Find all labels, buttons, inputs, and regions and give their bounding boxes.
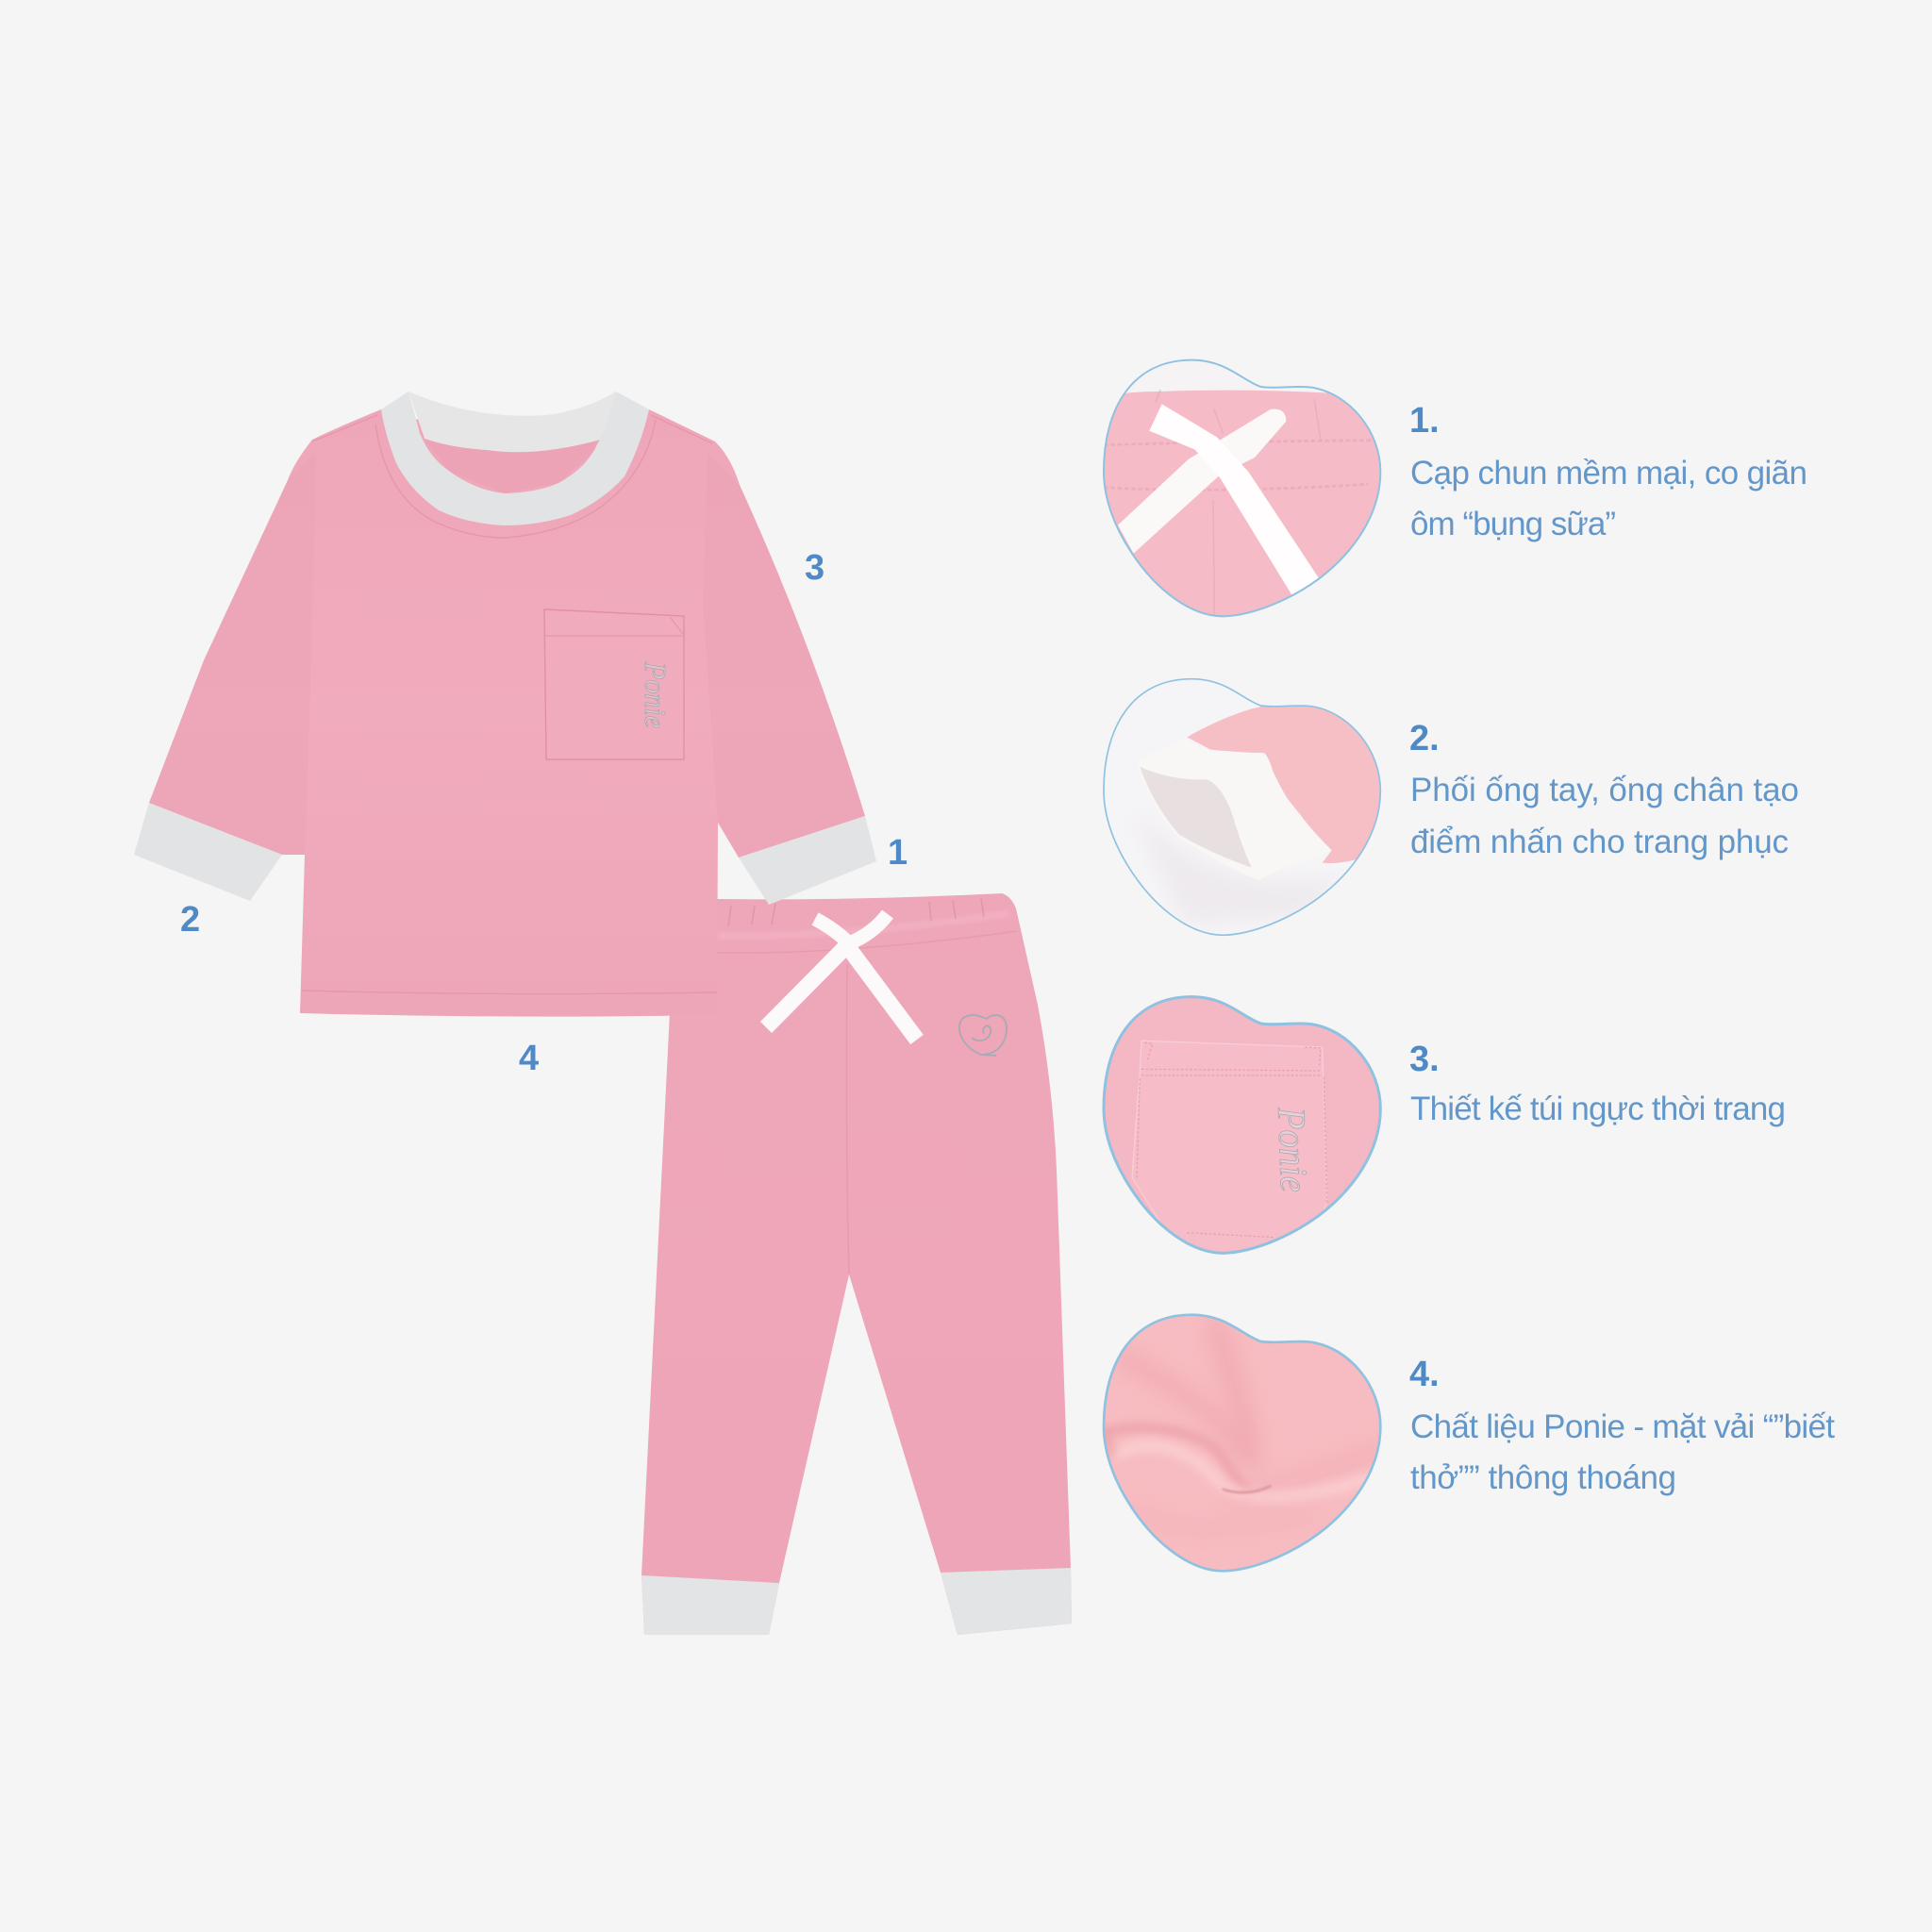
- callout number 2: 2: [180, 900, 200, 940]
- cuff opening: [1140, 767, 1252, 868]
- stitching: [302, 415, 717, 994]
- drawstring bow: [766, 914, 917, 1040]
- back collar: [408, 391, 616, 452]
- detail heart 3: pocket: [1102, 995, 1382, 1255]
- front collar: [381, 391, 649, 525]
- detail heart 4: fabric: [1102, 1313, 1382, 1573]
- right leg cuff: [941, 1568, 1072, 1635]
- sleeve: [1187, 703, 1384, 863]
- feature 4 text: 4.: [1409, 1355, 1440, 1394]
- left leg cuff: [641, 1575, 779, 1635]
- logo embroidery: [959, 1015, 1007, 1056]
- pocket: [544, 609, 684, 759]
- feature 1 text: [1409, 401, 1807, 542]
- product: pants: [641, 893, 1072, 1635]
- cuff band: [1220, 751, 1287, 798]
- detail heart 1: waistband: [1103, 358, 1381, 617]
- feature 3 text: Thiết kế túi ngực thời trang: [1410, 1091, 1786, 1127]
- feature 2 text: [1409, 719, 1799, 860]
- callout number 3: 3: [805, 548, 824, 588]
- pants waistband: [717, 898, 1017, 1274]
- feature 4 text: Chất liệu Ponie - mặt vải “”biết: [1410, 1408, 1835, 1445]
- right cuff: [739, 816, 876, 905]
- feature 1 text: Cạp chun mềm mại, co giãn: [1410, 455, 1807, 491]
- feature 1 text: ôm “bụng sữa”: [1410, 506, 1616, 542]
- left cuff: [134, 803, 282, 901]
- left sleeve shading: [149, 453, 316, 855]
- right sleeve shading: [703, 453, 865, 858]
- feature 1 text: 1.: [1409, 401, 1440, 441]
- feature 2 text: 2.: [1409, 719, 1440, 758]
- neck interior: [420, 433, 598, 493]
- pocket embroidery detail: Ponie: [1269, 1106, 1315, 1193]
- feature 3 text: [1409, 1040, 1786, 1127]
- feature 4 text: thở”” thông thoáng: [1410, 1459, 1676, 1496]
- bow ties: [1118, 409, 1286, 554]
- product: shirt: [134, 391, 876, 1017]
- callout number 1: 1: [888, 833, 908, 873]
- pocket embroidery: Ponie: [639, 661, 673, 728]
- detail heart 2: cuff: [1103, 677, 1381, 936]
- callout number 4: 4: [519, 1039, 539, 1078]
- feature 4 text: [1409, 1355, 1835, 1496]
- feature 2 text: Phối ống tay, ống chân tạo: [1410, 772, 1799, 808]
- feature 2 text: điểm nhấn cho trang phục: [1410, 824, 1789, 860]
- feature 3 text: 3.: [1409, 1040, 1440, 1079]
